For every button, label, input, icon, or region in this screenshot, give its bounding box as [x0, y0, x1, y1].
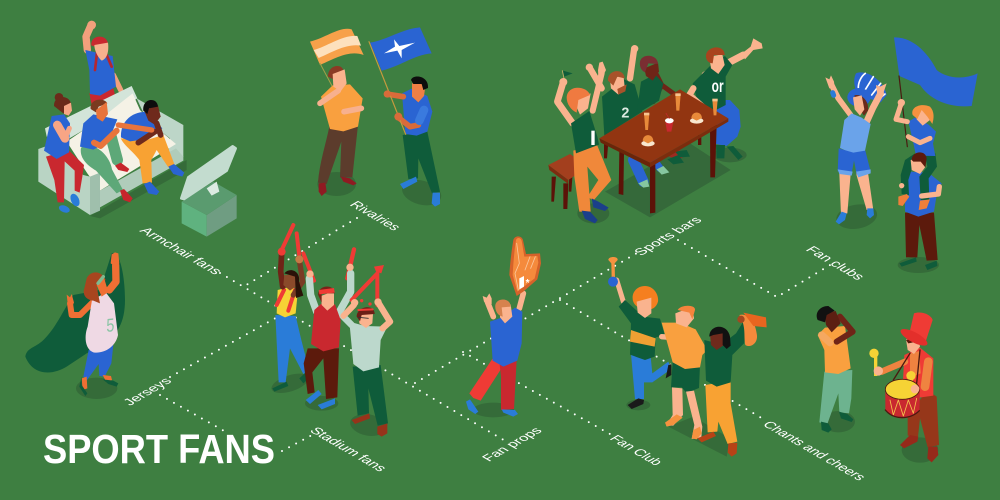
illustration: armchair fans on sofa with TV: [38, 21, 237, 237]
dotted connector network: [160, 218, 830, 451]
label: Fan props: Fan props: [479, 425, 546, 464]
label: Armchair fans: Armchair fans: [136, 225, 226, 277]
illustration: fan club woman, man and child with flag: [825, 37, 978, 273]
illustration: woman in jersey with cape: [25, 252, 125, 399]
illustration: woman in jersey with cape: 5: [106, 314, 114, 336]
label: Fan Club: Fan Club: [606, 433, 666, 468]
illustration: rivals with flags: [310, 27, 444, 209]
illustration: fans at sports bar table: 2: [621, 105, 629, 121]
illustration: fans at sports bar table: [548, 38, 763, 223]
illustration: drummer in red top hat: [869, 313, 939, 463]
label: Chants and cheers: Chants and cheers: [759, 419, 870, 483]
label: Stadium fans: Stadium fans: [306, 425, 391, 474]
illustration: fan with foam finger: *: [526, 278, 530, 289]
label: Sports bars: Sports bars: [631, 214, 705, 258]
label: Rivalries: Rivalries: [346, 199, 405, 233]
illustration: fans at sports bar table: or: [712, 76, 724, 96]
illustration: fan cheering through hands: [817, 306, 855, 433]
illustration: fan with foam finger: [466, 236, 541, 417]
label: Jerseys: Jerseys: [120, 375, 175, 408]
title: SPORT FANS: [43, 426, 275, 472]
label: Fan clubs: Fan clubs: [802, 244, 868, 282]
illustration: stadium fans with red batons: [269, 225, 390, 439]
illustration: fan club trio: [608, 257, 767, 457]
